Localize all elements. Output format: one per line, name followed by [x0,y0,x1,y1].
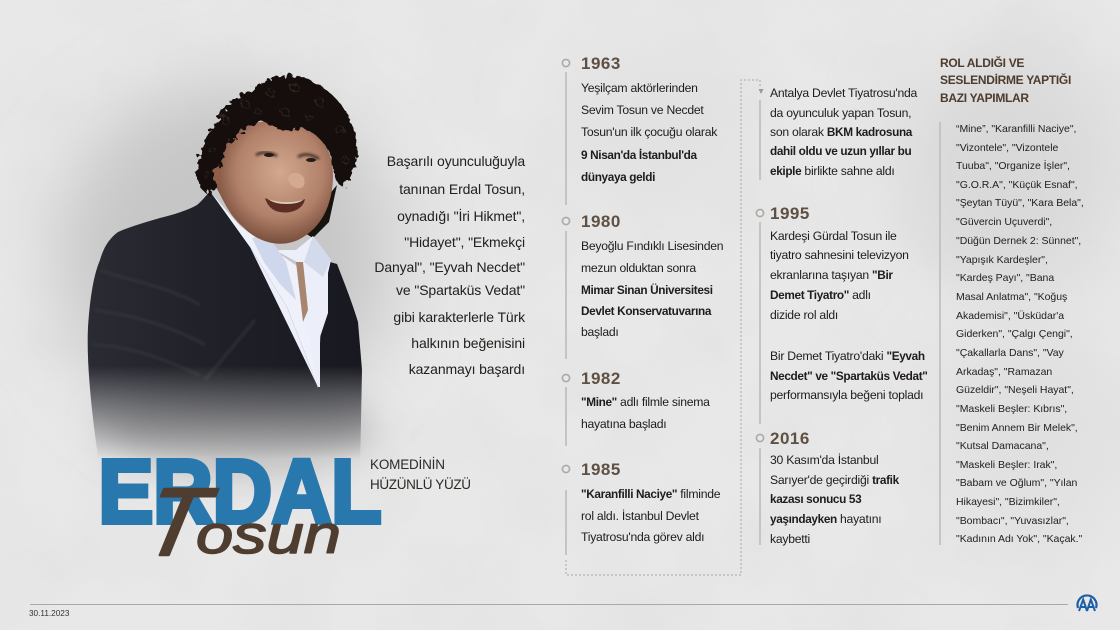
filmography list: "Düğün Dernek 2: Sünnet", [956,235,1081,247]
intro paragraph: "Hidayet", "Ekmekçi [404,234,525,250]
filmography list: "Kutsal Damacana", [956,440,1049,452]
filmography list: Giderken", "Çalgı Çengi", [956,328,1073,340]
filmography list: "Kadının Adı Yok", "Kaçak." [956,533,1082,545]
intro paragraph: oynadığı "İri Hikmet", [397,207,525,224]
timeline column 2 [756,86,928,546]
portrait photo of Erdal Tosun [88,75,362,470]
hair [197,75,357,195]
dark area behind neck [300,185,337,238]
1980 entry [562,212,723,359]
1985 entry [562,460,721,555]
1985 entry: rol aldı. İstanbul Devlet [581,509,700,523]
1963 entry: dünyaya geldi [581,170,655,184]
1963 entry [562,54,718,205]
2016 entry: 30 Kasım'da İstanbul [770,453,878,467]
1980 entry: başladı [581,325,619,339]
filmography list: "Vizontele", "Vizontele [956,142,1059,154]
filmography list: Akademisi", "Üsküdar'a [956,310,1064,322]
1963 entry: Tosun'un ilk çocuğu olarak [581,125,718,139]
Tosun [136,468,341,576]
intro paragraph: gibi karakterlerle Türk [393,309,526,325]
intro paragraph: tanınan Erdal Tosun, [399,181,525,197]
2016 entry [756,429,900,546]
1995 entry [756,204,928,424]
2016 entry: 2016 [770,429,810,448]
subtitle: KOMEDİNİN [370,457,445,472]
1963 continued: dahil oldu ve uzun yıllar bu [770,144,911,158]
1963 entry: 9 Nisan'da İstanbul'da [581,148,697,162]
filmography list: "Babam ve Oğlum", "Yılan [956,477,1078,489]
1985 entry: 1985 [581,460,621,479]
2016 entry: Sarıyer'de geçirdiği trafik [770,473,900,487]
filmography list: "Çakallarla Dans", "Vay [956,347,1065,359]
1985 entry: Tiyatrosu'nda görev aldı [581,530,704,544]
1980 entry: Mimar Sinan Üniversitesi [581,283,713,297]
1963 continued [759,86,918,180]
1982 entry: 1982 [581,369,621,388]
Tosun: osun [196,505,341,565]
subtitle: HÜZÜNLÜ YÜZÜ [370,477,471,492]
filmography heading: SESLENDİRME YAPTIĞI [940,72,1071,87]
filmography list: Hikayesi", "Bizimkiler", [956,496,1060,508]
filmography list: "G.O.R.A", "Küçük Esnaf", [956,179,1078,191]
1963 continued: son olarak BKM kadrosuna [770,125,913,139]
filmography list: "Maskeli Beşler: Kıbrıs", [956,403,1067,415]
filmography list: Masal Anlatma", "Koğuş [956,291,1067,303]
subtitle [370,457,471,492]
icon: AA logo [1078,595,1096,611]
intro paragraph: Başarılı oyunculuğuyla [387,153,525,169]
Tosun: T [136,468,224,576]
1963 continued: Antalya Devlet Tiyatrosu'nda [770,86,918,100]
1963 continued: ekiple birlikte sahne aldı [770,164,895,178]
intro paragraph [374,153,526,377]
1995 entry: ekranlarına taşıyan "Bir [770,268,893,282]
1963 entry: Sevim Tosun ve Necdet [581,103,704,117]
ERDAL: ERDAL [98,442,382,542]
filmography list: Arkadaş", "Ramazan [956,366,1052,378]
head [207,120,333,244]
1980 entry: mezun olduktan sonra [581,261,696,275]
1982 entry: hayatına başladı [581,417,666,431]
date: 30.11.2023 [29,609,70,618]
1995 entry: Bir Demet Tiyatro'daki "Eyvah [770,349,925,363]
filmography list [939,122,1084,545]
1985 entry: "Karanfilli Naciye" filminde [581,487,721,501]
1995 entry: tiyatro sahnesini televizyon [770,248,909,262]
title: ERDAL Tosun [98,442,382,576]
1963 continued: da oyunculuk yapan Tosun, [770,106,911,120]
filmography heading: BAZI YAPIMLAR [940,91,1029,105]
filmography list: Güzeldir", "Neşeli Hayat", [956,384,1074,396]
1995 entry: 1995 [770,204,810,223]
1995 entry: performansıyla beğeni topladı [770,388,923,402]
2016 entry: kaybetti [770,532,810,546]
filmography list: "Bombacı", "Yuvasızlar", [956,515,1069,527]
filmography list: Tuuba", "Organize İşler", [956,159,1070,172]
filmography list: "Yapışık Kardeşler", [956,254,1048,266]
1980 entry: Devlet Konservatuvarına [581,304,712,318]
footer line [30,604,1068,605]
intro paragraph: kazanmayı başardı [409,361,525,377]
shirt [212,194,331,387]
filmography list: "Maskeli Beşler: Irak", [956,459,1057,471]
filmography heading: ROL ALDIĞI VE [940,55,1024,70]
filmography list: "Güvercin Uçuverdi", [956,216,1052,228]
intro paragraph: ve "Spartaküs Vedat" [396,282,525,298]
filmography heading [940,55,1071,105]
2016 entry: yaşındayken hayatını [770,512,881,526]
dashed connector arrow [566,80,764,575]
filmography list: "Kardeş Payı", "Bana [956,272,1054,284]
1980 entry: 1980 [581,212,621,231]
filmography list: "Benim Annem Bir Melek", [956,422,1078,434]
1982 entry: "Mine" adlı filmle sinema [581,395,710,409]
timeline column 1 [562,54,723,555]
1982 entry [562,369,710,446]
1963 entry: 1963 [581,54,621,73]
filmography list: "Şeytan Tüyü", "Kara Bela", [956,197,1084,209]
1963 entry: Yeşilçam aktörlerinden [581,81,698,95]
intro paragraph: halkının beğenisini [411,335,525,351]
1995 entry: Kardeşi Gürdal Tosun ile [770,229,897,243]
filmography list: “Mine”, "Karanfilli Naciye", [956,123,1076,135]
intro paragraph: Danyal", "Eyvah Necdet" [374,259,525,275]
1995 entry: Necdet" ve "Spartaküs Vedat" [770,369,928,383]
1980 entry: Beyoğlu Fındıklı Lisesinden [581,239,723,253]
2016 entry: kazası sonucu 53 [770,492,862,506]
1995 entry: Demet Tiyatro" adlı [770,288,871,302]
jacket [88,192,362,470]
1995 entry: dizide rol aldı [770,308,838,322]
